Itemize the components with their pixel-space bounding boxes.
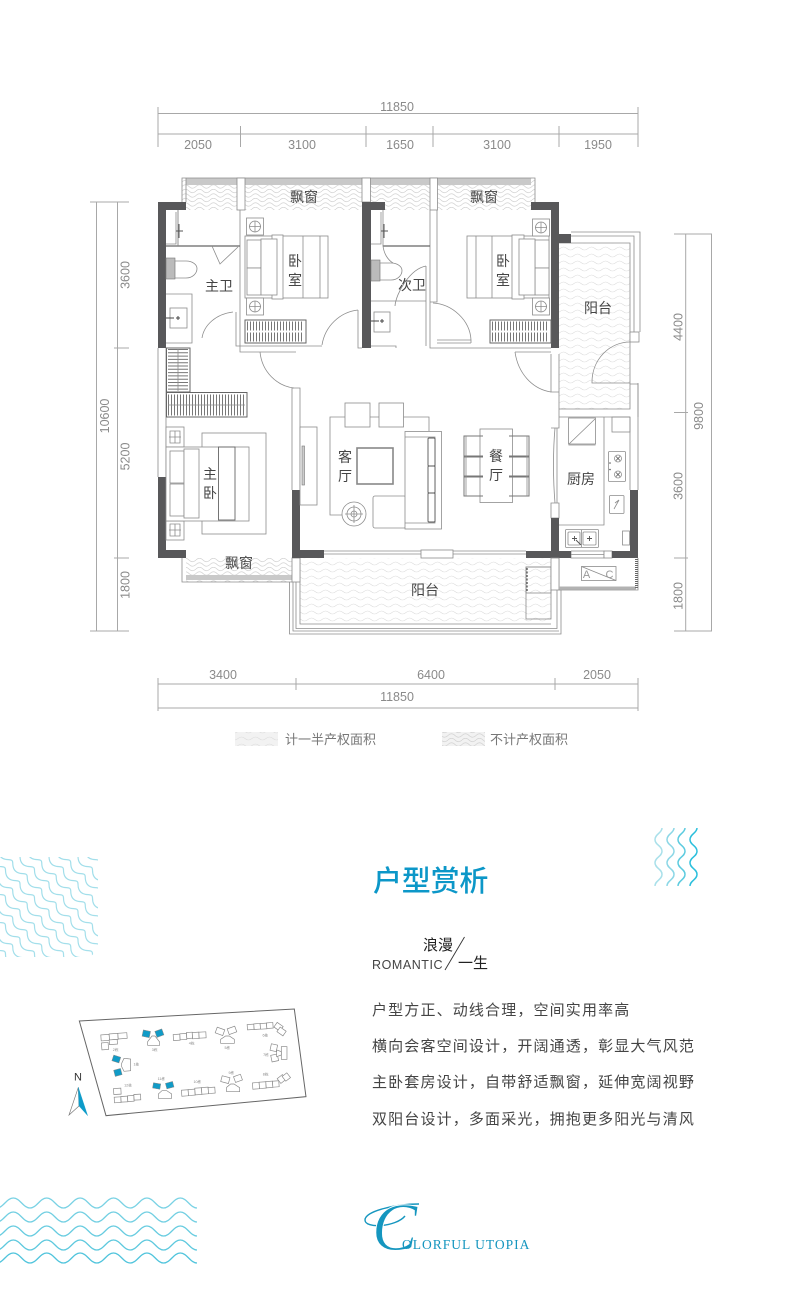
building 1: 1栋 [133, 1062, 140, 1067]
room labels: 飘窗 [470, 189, 498, 205]
second bath fixtures [371, 210, 426, 346]
top bay windows [182, 178, 535, 210]
bottom dimensions: 6400 [417, 668, 445, 682]
room labels: 飘窗 [225, 555, 253, 571]
description text [372, 1002, 695, 1128]
left dimensions: 5200 [118, 443, 132, 470]
room labels: 次卫 [398, 277, 426, 293]
top dimensions: 3100 [288, 138, 316, 152]
building 4 [173, 1032, 206, 1045]
bedroom 1 furniture [245, 218, 328, 343]
room labels: 主 [203, 466, 217, 482]
building 8 [252, 1072, 291, 1089]
main bath fixtures [166, 210, 197, 343]
left dimensions: 1800 [118, 571, 132, 599]
building 12 [114, 1083, 141, 1103]
legend [235, 732, 568, 747]
room labels: 飘窗 [290, 189, 318, 205]
building 2 [101, 1033, 127, 1052]
description text: 户型方正、动线合理，空间实用率高 [372, 1002, 630, 1019]
right dimensions: 1800 [672, 582, 686, 610]
dining set [464, 429, 529, 502]
floor plan [158, 178, 640, 634]
logo [365, 1189, 530, 1265]
room labels: 卧 [288, 253, 302, 269]
bottom dimensions: 11850 [380, 690, 414, 704]
building 7 [263, 1044, 287, 1062]
building 7: 7栋 [263, 1052, 269, 1057]
room labels: 卧 [203, 485, 217, 501]
building 9: 9栋 [228, 1070, 234, 1075]
room labels: 厅 [489, 467, 503, 483]
building 6 [247, 1022, 286, 1038]
right dimensions: 9800 [692, 402, 706, 430]
description text: 主卧套房设计，自带舒适飘窗，延伸宽阔视野 [372, 1073, 695, 1091]
building 11: 11栋 [158, 1076, 165, 1081]
building 4: 4栋 [189, 1040, 195, 1045]
bottom dimensions [158, 668, 638, 711]
AC ledge [551, 558, 638, 590]
room labels [203, 189, 612, 598]
top dimensions: 11850 [380, 100, 414, 114]
decorative waves: bottom left [0, 1198, 197, 1263]
room labels: 室 [288, 272, 302, 288]
bottom dimensions: 3400 [209, 668, 237, 682]
living room furniture [300, 403, 442, 529]
room labels: 阳台 [411, 582, 439, 598]
kitchen fixtures [566, 417, 630, 548]
top dimensions: 3100 [483, 138, 511, 152]
right dimensions: 4400 [672, 313, 686, 341]
building 10 [181, 1079, 215, 1096]
room labels: 卧 [496, 253, 510, 269]
interior walls [158, 210, 638, 558]
left dimensions [90, 202, 132, 631]
doors [202, 246, 551, 392]
room labels: 客 [338, 449, 352, 465]
building 11 [153, 1076, 174, 1098]
decorative waves: top left [0, 857, 98, 957]
room labels: 主卫 [205, 278, 233, 294]
room labels: 阳台 [584, 300, 612, 316]
building 8: 8栋 [263, 1072, 269, 1077]
tagline: ROMANTIC [372, 958, 443, 972]
legend: 计一半产权面积 [285, 732, 376, 747]
building 5: 5栋 [224, 1045, 230, 1050]
room labels: 厨房 [567, 471, 595, 487]
dark load-bearing walls [158, 202, 638, 558]
building 12: 12栋 [124, 1083, 132, 1088]
tagline [372, 937, 488, 972]
AC ledge: A [583, 569, 591, 581]
tagline: 浪漫 [423, 937, 453, 954]
room labels: 餐 [489, 448, 503, 464]
balcony: front [290, 558, 561, 634]
legend: 不计产权面积 [490, 732, 568, 747]
master bedroom furniture [166, 348, 266, 540]
right dimensions: 3600 [672, 472, 686, 500]
site plan [69, 1009, 306, 1116]
decorative waves: top right [655, 828, 697, 886]
north arrow [69, 1071, 88, 1116]
description text: 横向会客空间设计，开阔通透，彰显大气风范 [372, 1037, 695, 1055]
left dimensions: 10600 [98, 399, 112, 433]
building 5 [215, 1026, 237, 1050]
building 2: 2栋 [113, 1047, 119, 1052]
building 1 [112, 1055, 140, 1076]
building 6: 6栋 [262, 1033, 268, 1038]
bottom bay window [182, 558, 292, 582]
AC ledge: C [606, 569, 614, 581]
top dimensions: 1650 [386, 138, 414, 152]
building 10: 10栋 [193, 1079, 202, 1084]
description text: 双阳台设计，多面采光，拥抱更多阳光与清风 [372, 1111, 695, 1128]
building 3: 3栋 [152, 1047, 158, 1052]
room labels: 厅 [338, 468, 352, 484]
logo: C [372, 1189, 418, 1265]
building 3 [142, 1029, 164, 1052]
top dimensions [158, 100, 638, 152]
building 9 [221, 1070, 242, 1092]
balcony: side [559, 232, 640, 417]
top dimensions: 2050 [184, 138, 212, 152]
north arrow: N [74, 1071, 82, 1083]
right dimensions [672, 234, 712, 631]
left dimensions: 3600 [118, 261, 132, 289]
tagline: 一生 [458, 955, 488, 972]
top dimensions: 1950 [584, 138, 612, 152]
room labels: 室 [496, 272, 510, 288]
bedroom 2 furniture [467, 219, 551, 343]
section title: 户型赏析 [373, 865, 488, 898]
logo: OLORFUL UTOPIA [402, 1237, 530, 1252]
bottom dimensions: 2050 [583, 668, 611, 682]
